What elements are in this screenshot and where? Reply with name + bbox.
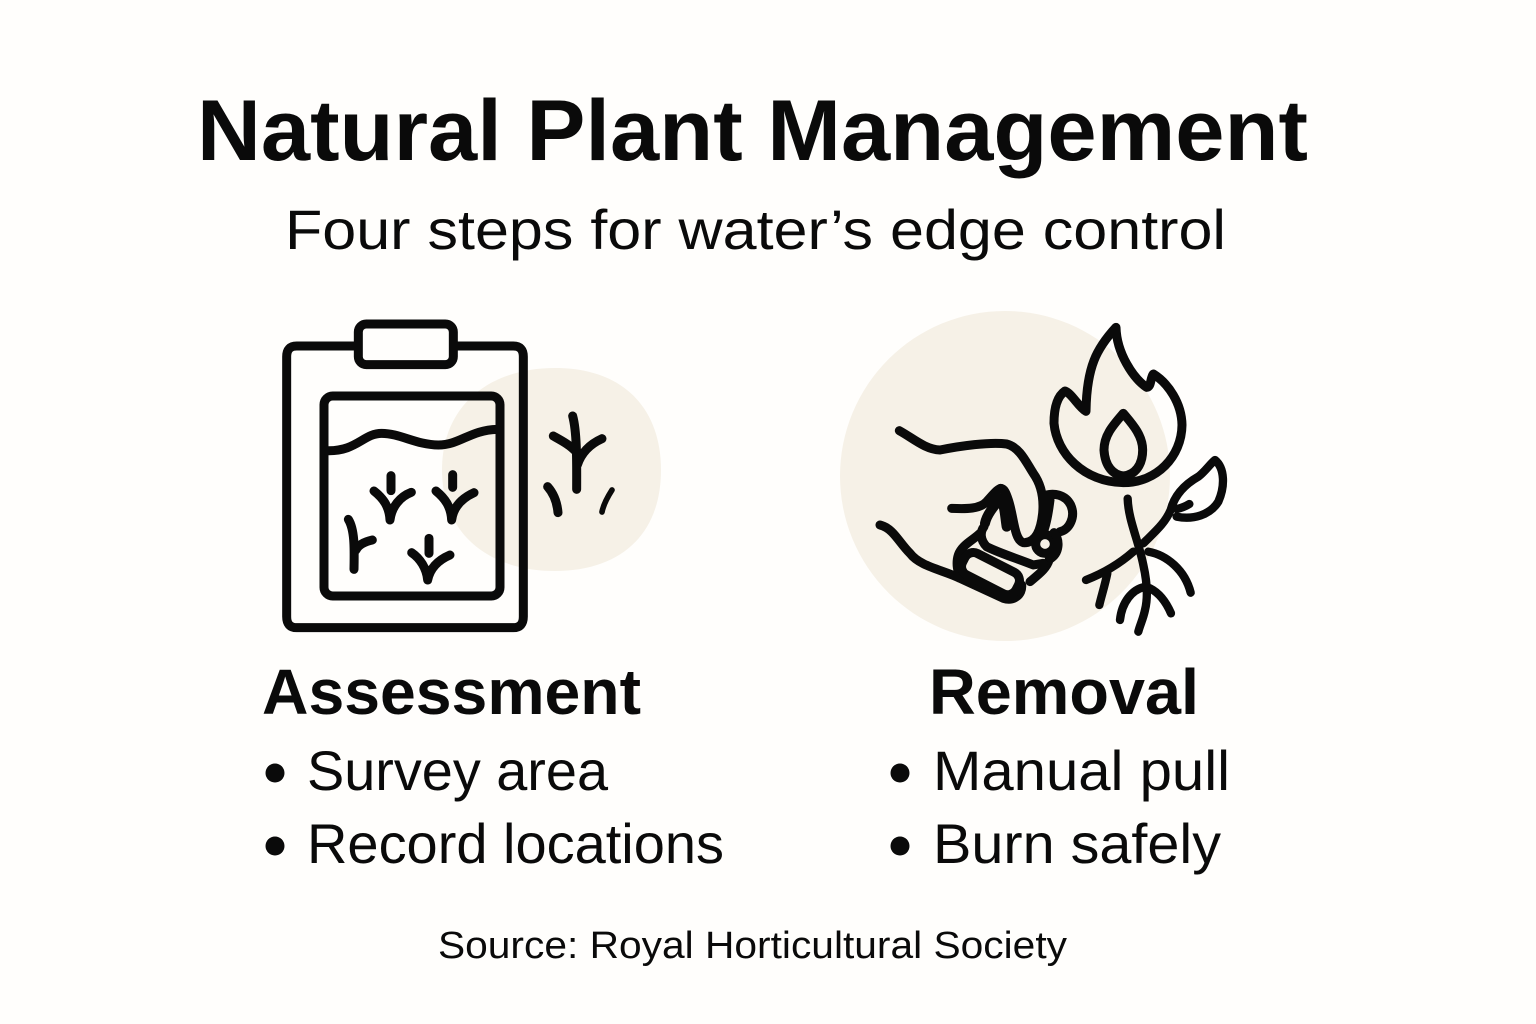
- icon: removal backdrop circle: [840, 311, 1170, 641]
- bullet list: removal: [890, 739, 1230, 875]
- icon: uprooted plant: [1086, 460, 1223, 632]
- bullet list: removal: Burn safely: [933, 812, 1221, 875]
- icon: assessment backdrop blob: [442, 368, 661, 571]
- title: Natural Plant Management: [197, 83, 1308, 179]
- source line: Source: Royal Horticultural Society: [438, 925, 1067, 967]
- icon: clipboard with water and plants: [287, 324, 612, 628]
- icon: hand pulling plant: [880, 431, 1073, 599]
- icon: flame: [1054, 327, 1182, 483]
- heading: removal: Removal: [929, 656, 1199, 728]
- bullet list: assessment: [266, 739, 724, 875]
- heading: assessment: Assessment: [262, 656, 641, 728]
- bullet list: removal: Manual pull: [933, 739, 1230, 802]
- bullet list: assessment: Record locations: [307, 812, 724, 875]
- subtitle: Four steps for water’s edge control: [285, 198, 1226, 261]
- panel: assessment: [262, 324, 724, 875]
- bullet list: assessment: Survey area: [307, 739, 609, 802]
- panel: removal: [840, 311, 1230, 875]
